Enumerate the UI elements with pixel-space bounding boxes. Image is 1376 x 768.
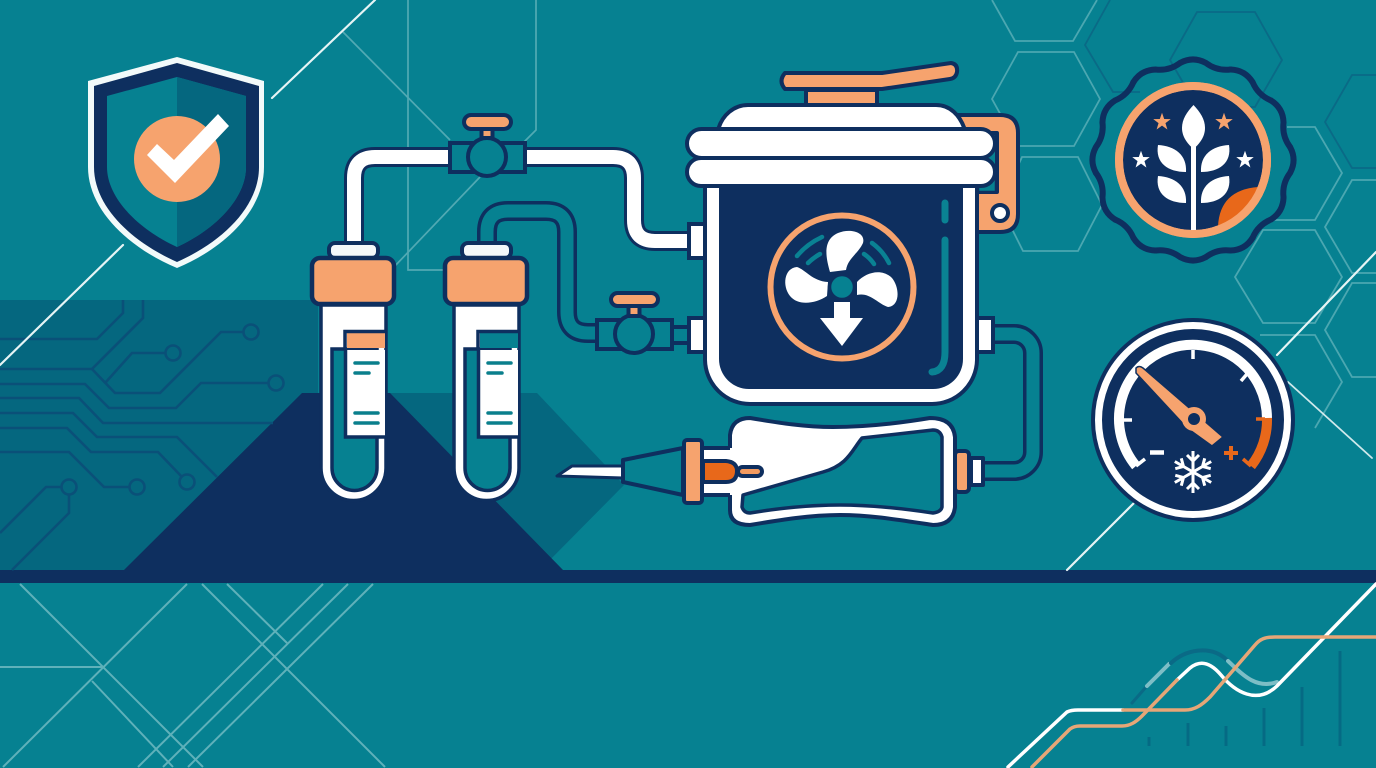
white trend line <box>1008 710 1123 767</box>
pressure pot <box>687 63 1033 471</box>
bars <box>1149 651 1340 746</box>
fan dial <box>770 216 914 358</box>
dark and pale arc <box>1132 687 1146 703</box>
orange trend lines <box>1123 637 1376 710</box>
bag <box>730 418 955 525</box>
bottom-left geometric lines <box>0 584 385 767</box>
needle <box>557 466 623 478</box>
bottom-right chart decoration <box>1008 584 1376 767</box>
badge: quality seal with plant <box>1087 54 1299 266</box>
highlight <box>932 203 945 372</box>
scale arc <box>1119 345 1267 466</box>
right outlet pipe <box>981 334 1033 471</box>
lid dome <box>718 105 965 130</box>
dark teal trapezoid <box>385 393 624 570</box>
lid rings <box>687 129 995 158</box>
light background lines behind pipes <box>343 0 536 270</box>
ports <box>689 224 705 258</box>
white diagonal accent lines <box>0 0 1376 570</box>
pipe: upper white pipe <box>354 157 690 245</box>
stars <box>1132 113 1254 167</box>
navy horizontal bar <box>0 570 1376 583</box>
icon: shield with check <box>88 57 264 268</box>
clasp <box>958 115 1018 232</box>
dark teal band: circuit panel <box>0 300 318 570</box>
test tube 2 <box>445 243 527 500</box>
navy trapezoid <box>124 393 563 570</box>
gauge: temperature dial <box>1091 318 1295 522</box>
hexagon pattern <box>992 0 1376 428</box>
lid handle <box>806 90 877 106</box>
minus sign <box>1150 450 1164 455</box>
needle <box>1136 366 1223 446</box>
plant <box>1158 105 1229 230</box>
ticks <box>1123 350 1247 466</box>
valve: upper <box>450 115 525 176</box>
pipe: lower teal pipe <box>487 211 600 333</box>
pot body <box>705 180 977 404</box>
valve: lower <box>597 293 689 353</box>
test tube 1 <box>312 243 394 500</box>
plus sign <box>1224 446 1238 460</box>
circuit board traces <box>0 300 284 570</box>
IV bag with needle <box>557 418 983 525</box>
scalloped ring <box>1087 54 1299 266</box>
icon: snowflake <box>1172 451 1214 493</box>
